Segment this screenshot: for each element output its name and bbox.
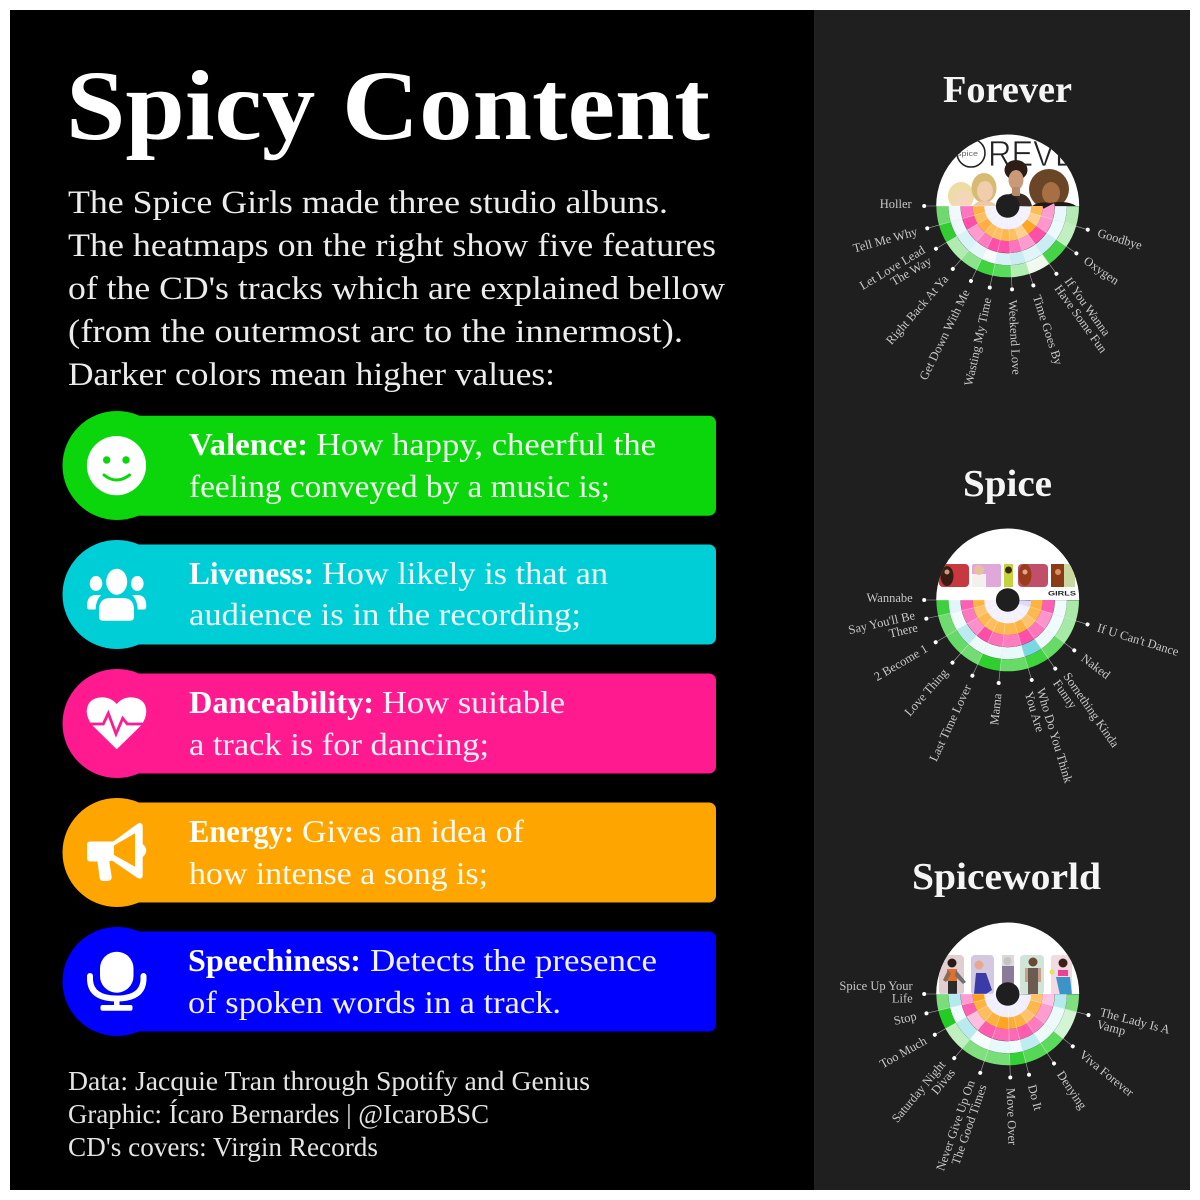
arc: danceability <box>967 559 1049 641</box>
panel: right dark background <box>814 10 1190 1190</box>
valence description <box>189 426 656 504</box>
icon: megaphone <box>87 823 146 881</box>
arc: liveness <box>954 547 1061 653</box>
arc: danceability <box>967 953 1049 1035</box>
album cover: Spiceworld <box>936 922 1080 994</box>
arc: energy <box>979 965 1037 1023</box>
heatmap: Spiceworld five arcs <box>942 929 1073 1059</box>
track labels: Spice: There <box>888 620 920 641</box>
valence description: feeling conveyed by a music is; <box>189 468 610 504</box>
track labels: Spice: Say You'll Be <box>847 608 916 637</box>
track labels: Spiceworld: Stop <box>892 1009 918 1028</box>
title: Spicy Content <box>66 50 710 161</box>
energy description <box>189 813 524 891</box>
panel: energy <box>62 798 716 907</box>
danceability description: Danceability: <box>189 684 374 720</box>
energy description: how intense a song is; <box>189 855 488 891</box>
track labels: Spice: Love Thing <box>902 665 951 719</box>
panel: speechiness <box>62 927 716 1036</box>
track labels: Spice <box>847 591 1181 789</box>
arc: danceability <box>967 165 1049 247</box>
track labels: Spiceworld: Never Give Up On <box>933 1078 978 1173</box>
danceability description: a track is for dancing; <box>189 726 489 762</box>
track labels: Spiceworld: Viva Forever <box>1077 1047 1137 1100</box>
album cover: Forever: REVER <box>988 133 1100 174</box>
intro text block: (from the outermost arc to the innermost). <box>68 314 683 350</box>
track labels: Spiceworld: Life <box>892 992 913 1006</box>
track labels: Spiceworld: Move Over <box>1004 1088 1019 1146</box>
speechiness description: Speechiness: <box>188 942 361 978</box>
liveness description: Liveness: <box>189 555 314 591</box>
track labels: Spiceworld: Too Much <box>877 1033 930 1071</box>
disc hole <box>996 588 1020 612</box>
track ticks: Spice <box>922 598 1090 685</box>
album cover: Spice: GIRLS <box>1048 592 1076 598</box>
track labels: Spiceworld: Do It <box>1025 1083 1045 1112</box>
liveness description <box>189 555 608 632</box>
track labels: Spice: You Are <box>1022 690 1047 734</box>
intro text block: of the CD's tracks which are explained bellow <box>68 271 725 307</box>
track labels: Spice: Funny <box>1050 677 1080 712</box>
credits: Data: Jacquie Tran through Spotify and Genius <box>68 1066 590 1096</box>
album cover: Forever <box>936 134 1080 206</box>
track labels: Spiceworld: Divas <box>928 1066 958 1097</box>
valence description: How happy, cheerful the <box>316 426 656 462</box>
panel: liveness <box>62 540 716 649</box>
panel: danceability <box>62 669 716 778</box>
energy description: Energy: <box>189 813 294 849</box>
track labels: Forever: If You Wanna <box>1062 275 1113 339</box>
icon: microphone <box>90 952 144 1011</box>
track labels: Spice: Who Do You Think <box>1034 686 1075 785</box>
speechiness description: of spoken words in a track. <box>188 984 561 1020</box>
arc: speechiness <box>990 189 1025 223</box>
track labels: Spice: 2 Become 1 <box>872 642 930 684</box>
track labels: Spiceworld <box>839 979 1171 1177</box>
panel: left black background <box>10 10 814 1190</box>
arc: valence <box>942 141 1073 271</box>
icon: audience <box>87 569 146 621</box>
liveness description: How likely is that an <box>322 555 608 591</box>
speechiness description <box>188 942 657 1020</box>
track labels: Spice: Naked <box>1078 651 1114 682</box>
arc: energy <box>979 571 1037 629</box>
track labels: Forever: The Way <box>888 253 935 289</box>
disc hole <box>996 982 1020 1006</box>
track labels: Spiceworld: The Lady Is A <box>1098 1005 1171 1037</box>
chart: Forever disc <box>851 130 1144 387</box>
disc hole <box>996 194 1020 218</box>
arc: energy <box>979 177 1037 235</box>
track labels: Spice: If U Can't Dance <box>1096 621 1181 659</box>
credits <box>68 1066 590 1162</box>
icon: heart with pulse <box>84 697 149 749</box>
track labels: Spice: Last Time Lover <box>926 681 975 764</box>
track labels: Spiceworld: Spice Up Your <box>839 979 913 993</box>
arc: valence <box>942 929 1073 1059</box>
track labels: Forever: Right Back At Ya <box>883 272 951 347</box>
intro text block: The Spice Girls made three studio albuns. <box>68 185 668 221</box>
arc: liveness <box>954 153 1061 259</box>
speechiness description: Detects the presence <box>370 942 657 978</box>
panel: valence <box>62 411 716 520</box>
track labels: Spice: Wannabe <box>866 591 913 605</box>
intro text block: The heatmaps on the right show five features <box>68 228 716 264</box>
track labels: Forever: Weekend Love <box>1006 300 1024 376</box>
track labels: Forever: Tell Me Why <box>851 224 920 256</box>
track labels: Forever: Let Love Lead <box>857 243 927 293</box>
track labels: Forever: Goodbye <box>1096 226 1144 253</box>
track labels: Forever: Wasting My Time <box>961 296 994 387</box>
track labels: Spice: Mama <box>987 692 1005 726</box>
track labels: Forever <box>851 197 1144 387</box>
arc: liveness <box>954 941 1061 1047</box>
chart: Spiceworld disc <box>839 918 1171 1177</box>
heading: Spice: Spice <box>963 463 1052 505</box>
track labels: Spiceworld: The Good Times <box>949 1082 990 1167</box>
credits: CD's covers: Virgin Records <box>68 1132 378 1162</box>
heatmap: Forever five arcs <box>942 141 1073 271</box>
track labels: Forever: Have Some Fun <box>1052 282 1110 356</box>
arc: speechiness <box>990 583 1025 617</box>
track labels: Forever: Holler <box>880 197 913 211</box>
liveness description: audience is in the recording; <box>189 596 581 632</box>
track labels: Spice: Something Kinda <box>1060 670 1122 750</box>
heading: Forever: Forever <box>943 69 1072 111</box>
valence description: Valence: <box>189 426 308 462</box>
track ticks: Forever <box>922 204 1090 291</box>
chart: Spice disc <box>847 525 1181 789</box>
danceability description <box>189 684 565 762</box>
track labels: Forever: Oxygen <box>1081 254 1122 288</box>
intro text block <box>68 185 725 393</box>
arc: speechiness <box>990 977 1025 1011</box>
album cover: Forever: spice <box>957 151 978 158</box>
track labels: Spiceworld: Vamp <box>1095 1017 1127 1038</box>
credits: Graphic: Ícaro Bernardes | @IcaroBSC <box>68 1099 489 1129</box>
track labels: Spiceworld: Denying <box>1054 1068 1090 1113</box>
icon: smiley face <box>87 436 146 495</box>
heatmap: Spice five arcs <box>942 535 1073 665</box>
heading: Spiceworld: Spiceworld <box>912 856 1101 898</box>
arc: valence <box>942 535 1073 665</box>
energy description: Gives an idea of <box>302 813 524 849</box>
danceability description: How suitable <box>382 684 565 720</box>
track ticks: Spiceworld <box>922 992 1091 1080</box>
track labels: Forever: Get Down With Me <box>917 287 973 382</box>
track labels: Spiceworld: Saturday Night <box>889 1058 948 1125</box>
track labels: Forever: Time Goes By <box>1030 293 1066 367</box>
album cover: Spice <box>936 528 1080 600</box>
intro text block: Darker colors mean higher values: <box>68 357 555 393</box>
